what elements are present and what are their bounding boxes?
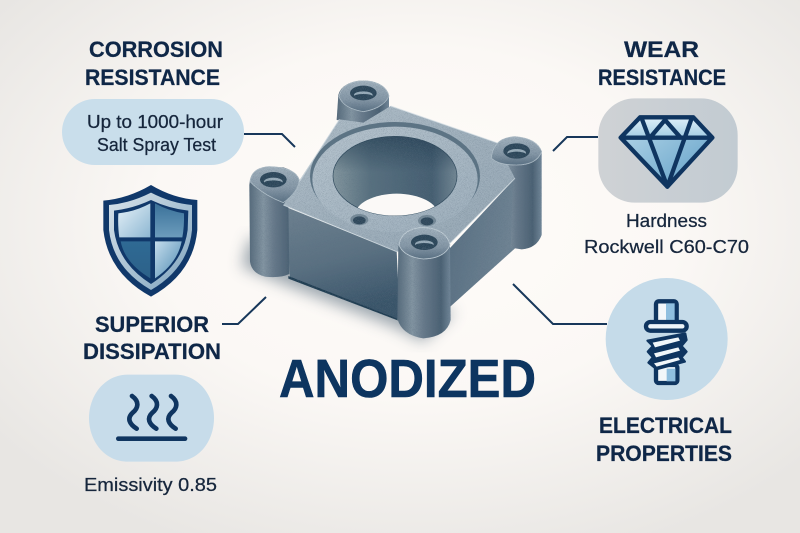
recessed ring bbox=[310, 122, 480, 230]
metal anodized part bbox=[242, 81, 542, 342]
heading: electrical properties: PROPERTIES bbox=[596, 441, 732, 466]
heading: wear resistance: RESISTANCE bbox=[598, 65, 726, 90]
heading: superior dissipation: DISSIPATION bbox=[83, 339, 221, 364]
front pillar bbox=[397, 227, 451, 338]
top face bbox=[283, 106, 515, 252]
icon: insulator bolt bbox=[606, 278, 728, 400]
threaded holes bbox=[260, 172, 287, 187]
text: hardness: Hardness bbox=[626, 211, 707, 231]
text: hardness bbox=[584, 211, 749, 257]
dark bottom edge bbox=[288, 276, 398, 321]
top pillar bbox=[337, 81, 389, 123]
top cap bbox=[339, 81, 389, 112]
heading: superior dissipation: SUPERIOR bbox=[95, 312, 209, 337]
heading: superior dissipation bbox=[83, 312, 221, 364]
callout: salt spray test: Up to 1000-hour bbox=[87, 112, 223, 132]
heading: corrosion resistance bbox=[85, 37, 223, 90]
callout: salt spray test bbox=[62, 99, 244, 165]
right side wall bbox=[447, 178, 515, 308]
left pillar bbox=[249, 167, 299, 277]
front cap bbox=[399, 227, 450, 259]
heading: wear resistance bbox=[598, 37, 726, 90]
text: hardness: Rockwell C60-C70 bbox=[584, 237, 749, 257]
heading: wear resistance: WEAR bbox=[624, 37, 699, 62]
bore opening bbox=[358, 194, 435, 216]
central bore bbox=[333, 136, 457, 216]
heading: corrosion resistance: RESISTANCE bbox=[85, 65, 220, 90]
right pillar bbox=[492, 137, 542, 249]
heading: corrosion resistance: CORROSION bbox=[89, 37, 223, 62]
title: ANODIZED bbox=[279, 349, 536, 409]
icon: shield bbox=[103, 185, 197, 297]
icon: diamond bbox=[598, 98, 738, 203]
left cap bbox=[250, 167, 299, 203]
text: emissivity: Emissivity 0.85 bbox=[84, 475, 217, 495]
heading: electrical properties bbox=[596, 413, 732, 466]
cast shadow bbox=[242, 237, 455, 342]
left side wall bbox=[285, 207, 400, 320]
top face edge highlights bbox=[283, 106, 515, 252]
right cap bbox=[492, 137, 542, 165]
small holes bbox=[350, 214, 368, 225]
icon: heat waves bbox=[89, 375, 214, 462]
heading: electrical properties: ELECTRICAL bbox=[599, 413, 732, 438]
leader lines bbox=[222, 134, 607, 324]
callout: salt spray test: Salt Spray Test bbox=[97, 135, 216, 155]
